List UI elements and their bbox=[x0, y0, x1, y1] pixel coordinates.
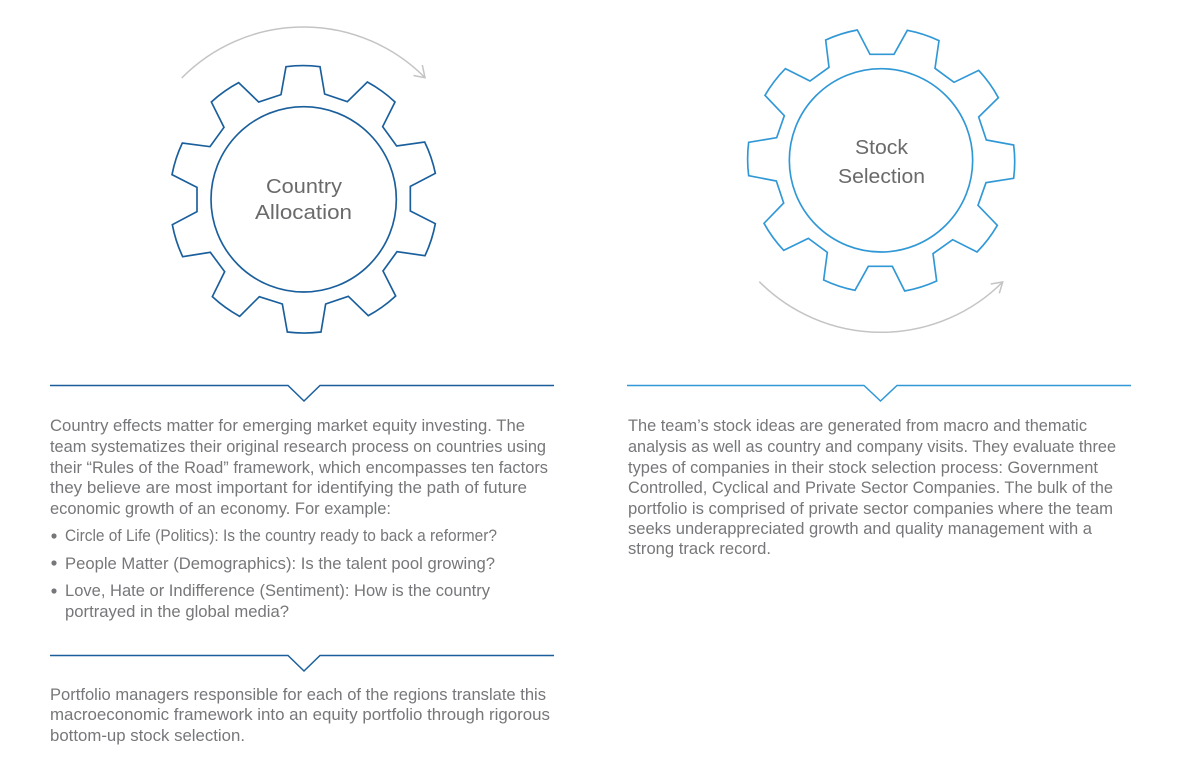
text block: stock ideas: types of companies in their stock selection process: Government bbox=[628, 459, 1098, 477]
text block: stock ideas: portfolio is comprised of private sector companies where the team bbox=[628, 500, 1113, 518]
heading: stock selection: Selection bbox=[838, 165, 925, 188]
list: country factors: People Matter (Demographics): Is the talent pool growing? bbox=[65, 555, 495, 573]
text block: country effects: Country effects matter for emerging market equity investing. The bbox=[50, 417, 525, 435]
text block: stock ideas: The team’s stock ideas are generated from macro and thematic bbox=[628, 417, 1087, 435]
text block: country effects: their “Rules of the Road” framework, which encompasses ten factors bbox=[50, 459, 548, 477]
text block: portfolio managers bbox=[50, 686, 550, 745]
heading: country allocation: Allocation bbox=[255, 201, 352, 224]
panel: stock selection bbox=[627, 30, 1131, 558]
heading: stock selection: Stock bbox=[855, 136, 909, 159]
text block: stock ideas: Controlled, Cyclical and Private Sector Companies. The bulk of the bbox=[628, 479, 1113, 497]
text block: country effects bbox=[50, 417, 548, 518]
list: country factors: portrayed in the global media? bbox=[65, 603, 289, 621]
arrow: country rotation bbox=[182, 27, 425, 78]
divider: portfolio bbox=[50, 656, 554, 671]
text block: stock ideas: strong track record. bbox=[628, 540, 771, 558]
heading: country allocation bbox=[255, 175, 352, 224]
list: country factors: Love, Hate or Indifference (Sentiment): How is the country bbox=[65, 582, 491, 600]
list: country factors: Circle of Life (Politics): Is the country ready to back a reformer? bbox=[65, 527, 497, 545]
list: country factors bbox=[51, 527, 497, 621]
icon: country gear bbox=[172, 66, 435, 333]
divider: stock bbox=[627, 386, 1131, 401]
heading: country allocation: Country bbox=[266, 175, 343, 198]
text block: country effects: economic growth of an economy. For example: bbox=[50, 500, 391, 518]
divider: country bbox=[50, 386, 554, 401]
text block: portfolio managers: bottom-up stock selection. bbox=[50, 727, 245, 745]
icon: stock gear bbox=[748, 30, 1015, 291]
text block: country effects: they believe are most important for identifying the path of future bbox=[50, 479, 527, 497]
text block: stock ideas: analysis as well as country and company visits. They evaluate three bbox=[628, 438, 1116, 456]
panel: country allocation bbox=[50, 27, 554, 745]
text block: stock ideas bbox=[628, 417, 1116, 558]
arrow: stock rotation bbox=[759, 282, 1003, 332]
text block: country effects: team systematizes their original research process on countries using bbox=[50, 438, 546, 456]
text block: portfolio managers: Portfolio managers responsible for each of the regions translate this bbox=[50, 686, 546, 704]
heading: stock selection bbox=[838, 136, 925, 188]
text block: stock ideas: seeks underappreciated growth and quality management with a bbox=[628, 520, 1093, 538]
text block: portfolio managers: macroeconomic framework into an equity portfolio through rigorous bbox=[50, 706, 550, 724]
